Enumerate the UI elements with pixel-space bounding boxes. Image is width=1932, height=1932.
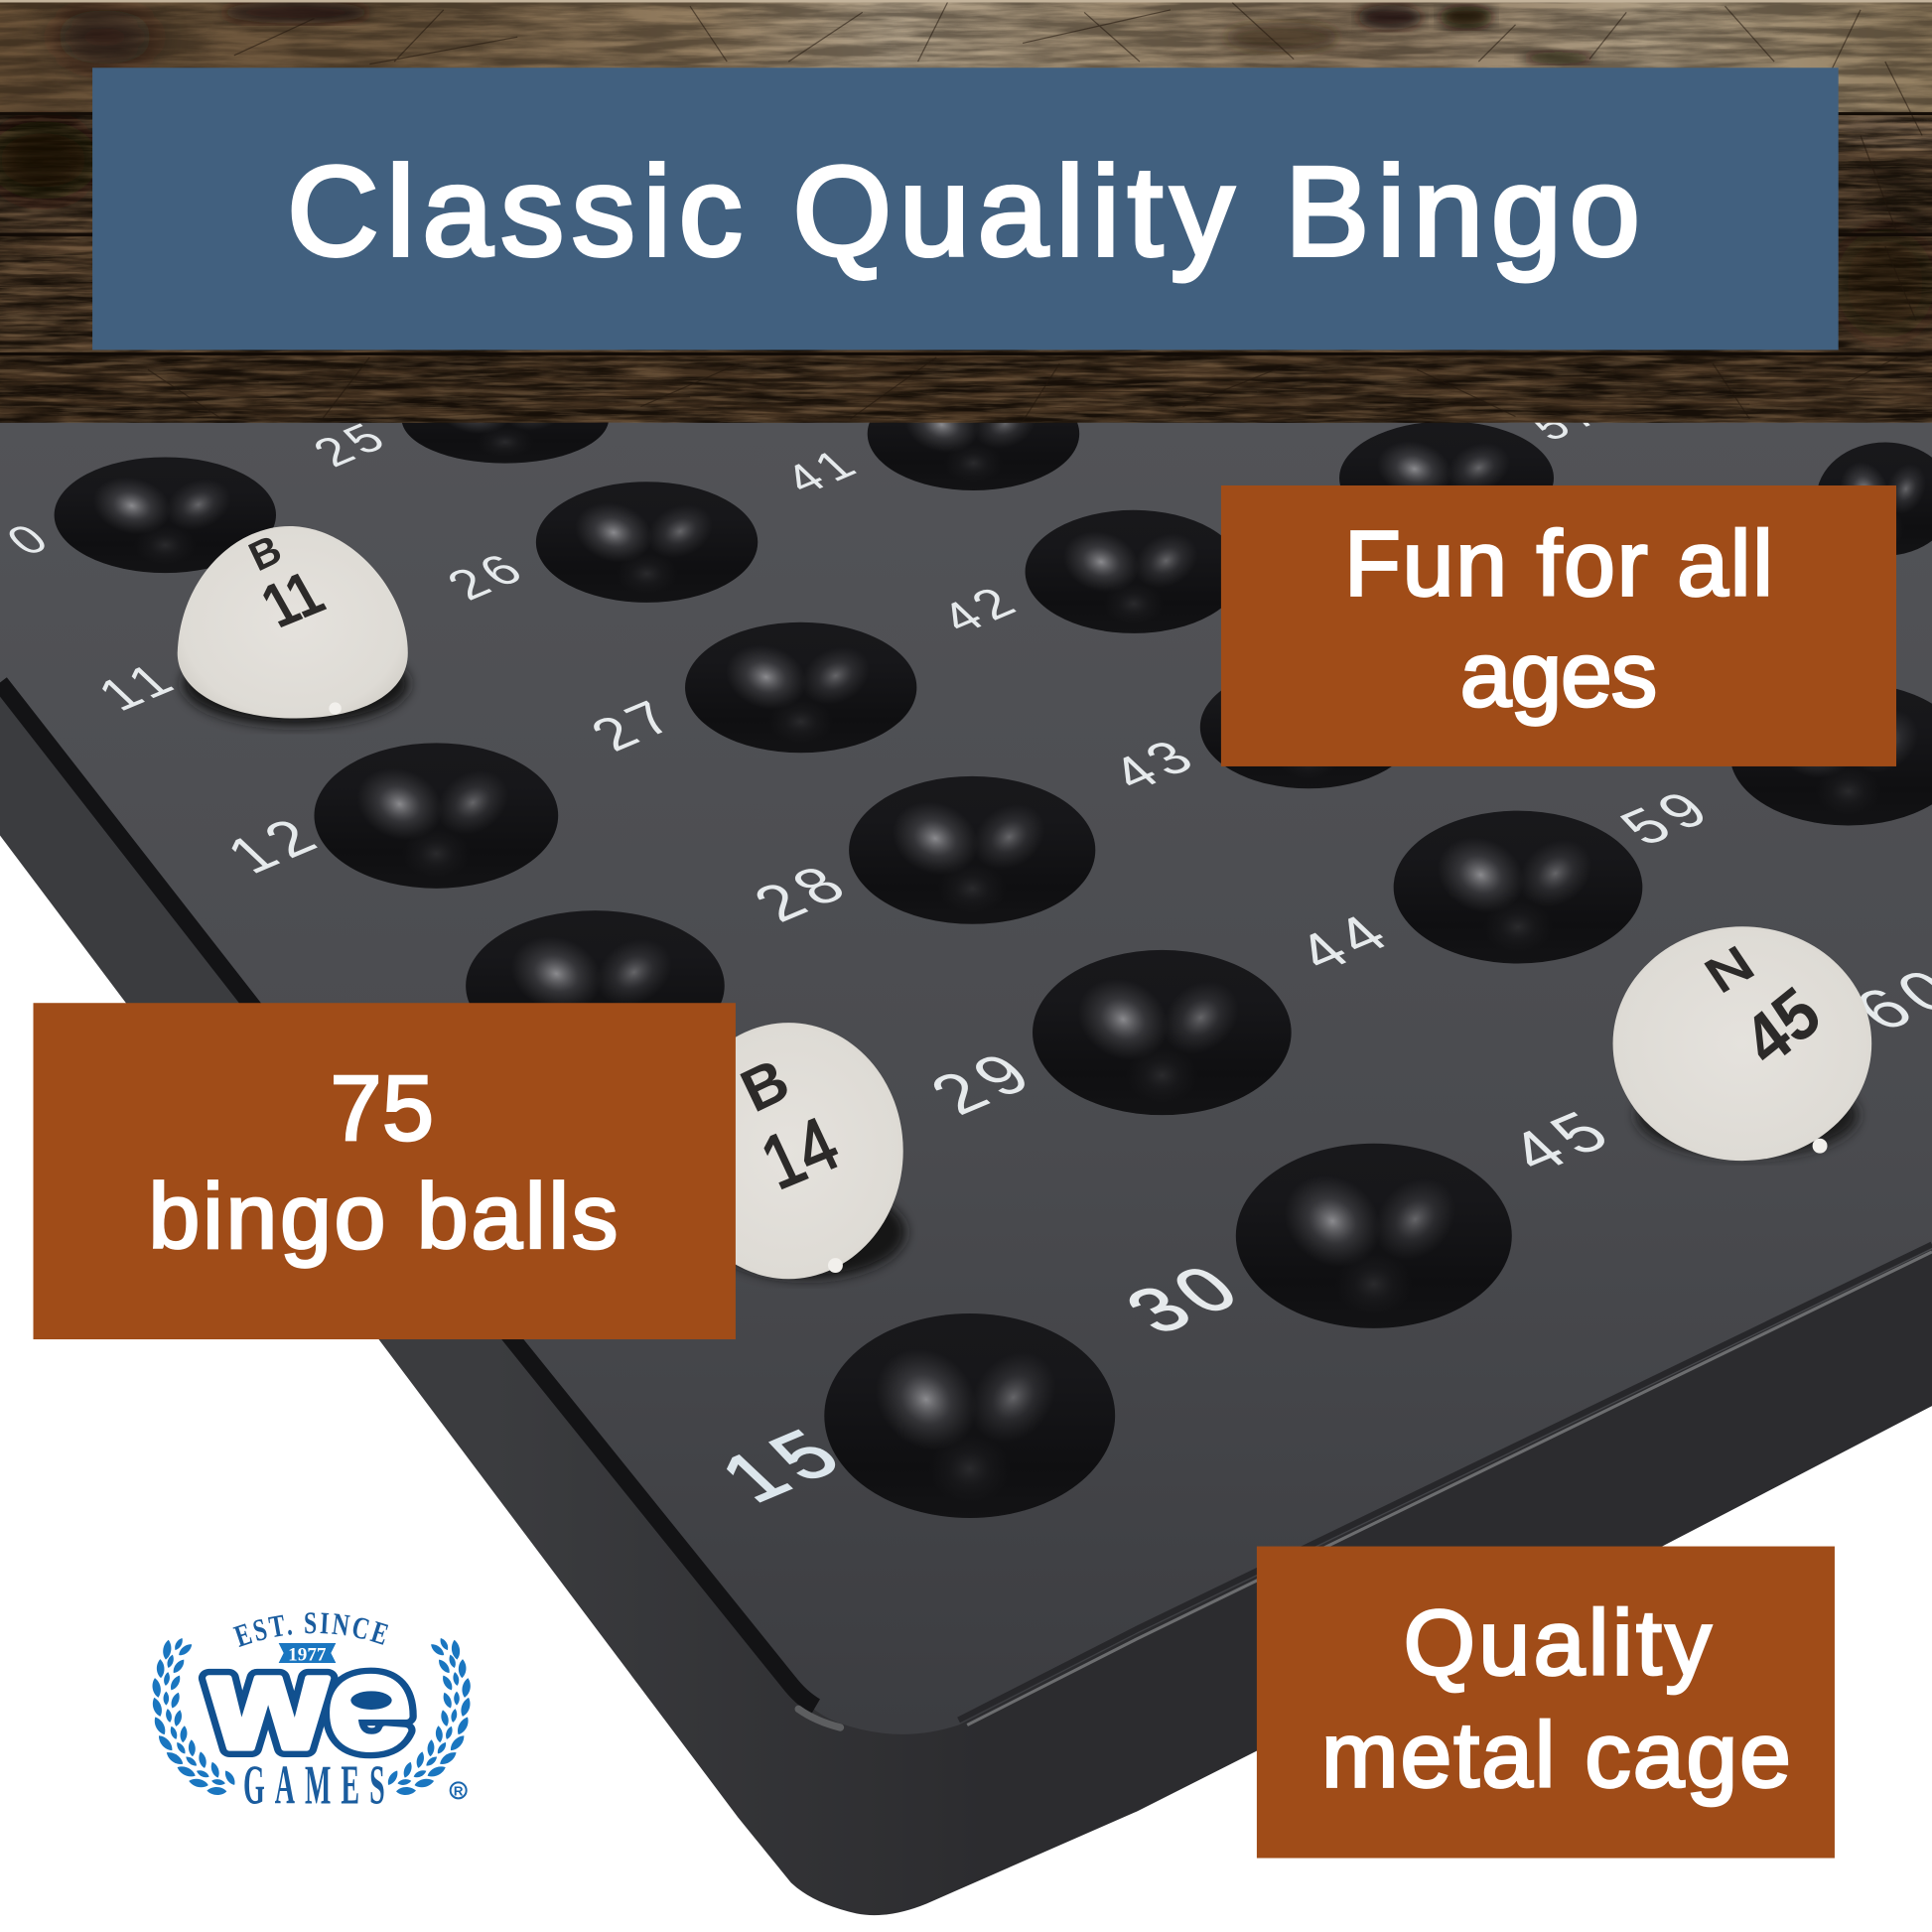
ball N 45: N <box>1695 935 1763 1003</box>
ball B 11: 11 <box>250 559 336 641</box>
title text: Classic Quality Bingo <box>287 141 1640 283</box>
WE wordmark: we <box>208 1629 411 1777</box>
logo: WE Games <box>153 1612 471 1816</box>
WE wordmark: we <box>208 1629 411 1777</box>
ball B 11: B <box>242 526 288 580</box>
printed numbers: 44 <box>1282 902 1409 982</box>
callout: fun for all ages: Fun for all <box>1344 511 1773 615</box>
cup holes <box>55 374 1932 1518</box>
printed numbers: 29 <box>914 1039 1054 1127</box>
printed numbers <box>0 389 1932 1516</box>
callout: 75 bingo balls <box>34 1003 736 1339</box>
ball N 45 <box>1613 926 1871 1161</box>
GAMES text: GAMES <box>243 1754 395 1816</box>
tray groove and rim <box>0 683 1932 1727</box>
EST. SINCE arc text: EST. SINCE <box>232 1612 389 1647</box>
callout: fun for all ages <box>1221 485 1896 766</box>
printed numbers: 26 <box>435 543 539 609</box>
printed numbers: 12 <box>212 805 337 884</box>
printed numbers: 11 <box>85 652 192 720</box>
printed numbers: 59 <box>1606 778 1728 856</box>
callout: 75 bingo balls: 75 <box>331 1056 434 1160</box>
callout: quality metal cage: metal cage <box>1321 1704 1791 1807</box>
ball B 14: B <box>731 1045 799 1125</box>
registered mark: R <box>454 1783 464 1798</box>
tray body <box>0 423 1932 1915</box>
1977 ribbon: 1977 <box>288 1644 326 1665</box>
printed numbers: 30 <box>1109 1250 1264 1347</box>
registered mark <box>451 1782 467 1798</box>
wood plank background <box>0 0 1932 423</box>
printed numbers: 15 <box>702 1413 867 1516</box>
1977 ribbon <box>279 1643 336 1665</box>
printed numbers: 41 <box>773 440 873 502</box>
printed numbers: 25 <box>303 413 401 476</box>
callout: 75 bingo balls: bingo balls <box>149 1165 618 1268</box>
ball B 14: 14 <box>750 1102 851 1206</box>
printed numbers: 27 <box>577 688 692 760</box>
laurel wreath left <box>150 1637 237 1795</box>
callout: fun for all ages: ages <box>1460 622 1657 726</box>
title banner <box>92 68 1839 349</box>
printed numbers: 57 <box>1520 389 1614 449</box>
printed numbers: 43 <box>1097 728 1212 800</box>
bingo ball tray photo <box>0 374 1932 1915</box>
printed numbers: 42 <box>928 577 1033 642</box>
ball B 11 <box>178 526 409 726</box>
ball B 14 <box>674 1023 905 1279</box>
printed numbers: 28 <box>740 853 867 933</box>
callout: quality metal cage <box>1257 1547 1835 1859</box>
printed numbers: 45 <box>1492 1097 1632 1184</box>
laurel wreath right <box>385 1637 473 1795</box>
callout: quality metal cage: Quality <box>1404 1591 1712 1695</box>
tray top surface <box>0 423 1932 1734</box>
ball N 45: 45 <box>1728 971 1835 1081</box>
